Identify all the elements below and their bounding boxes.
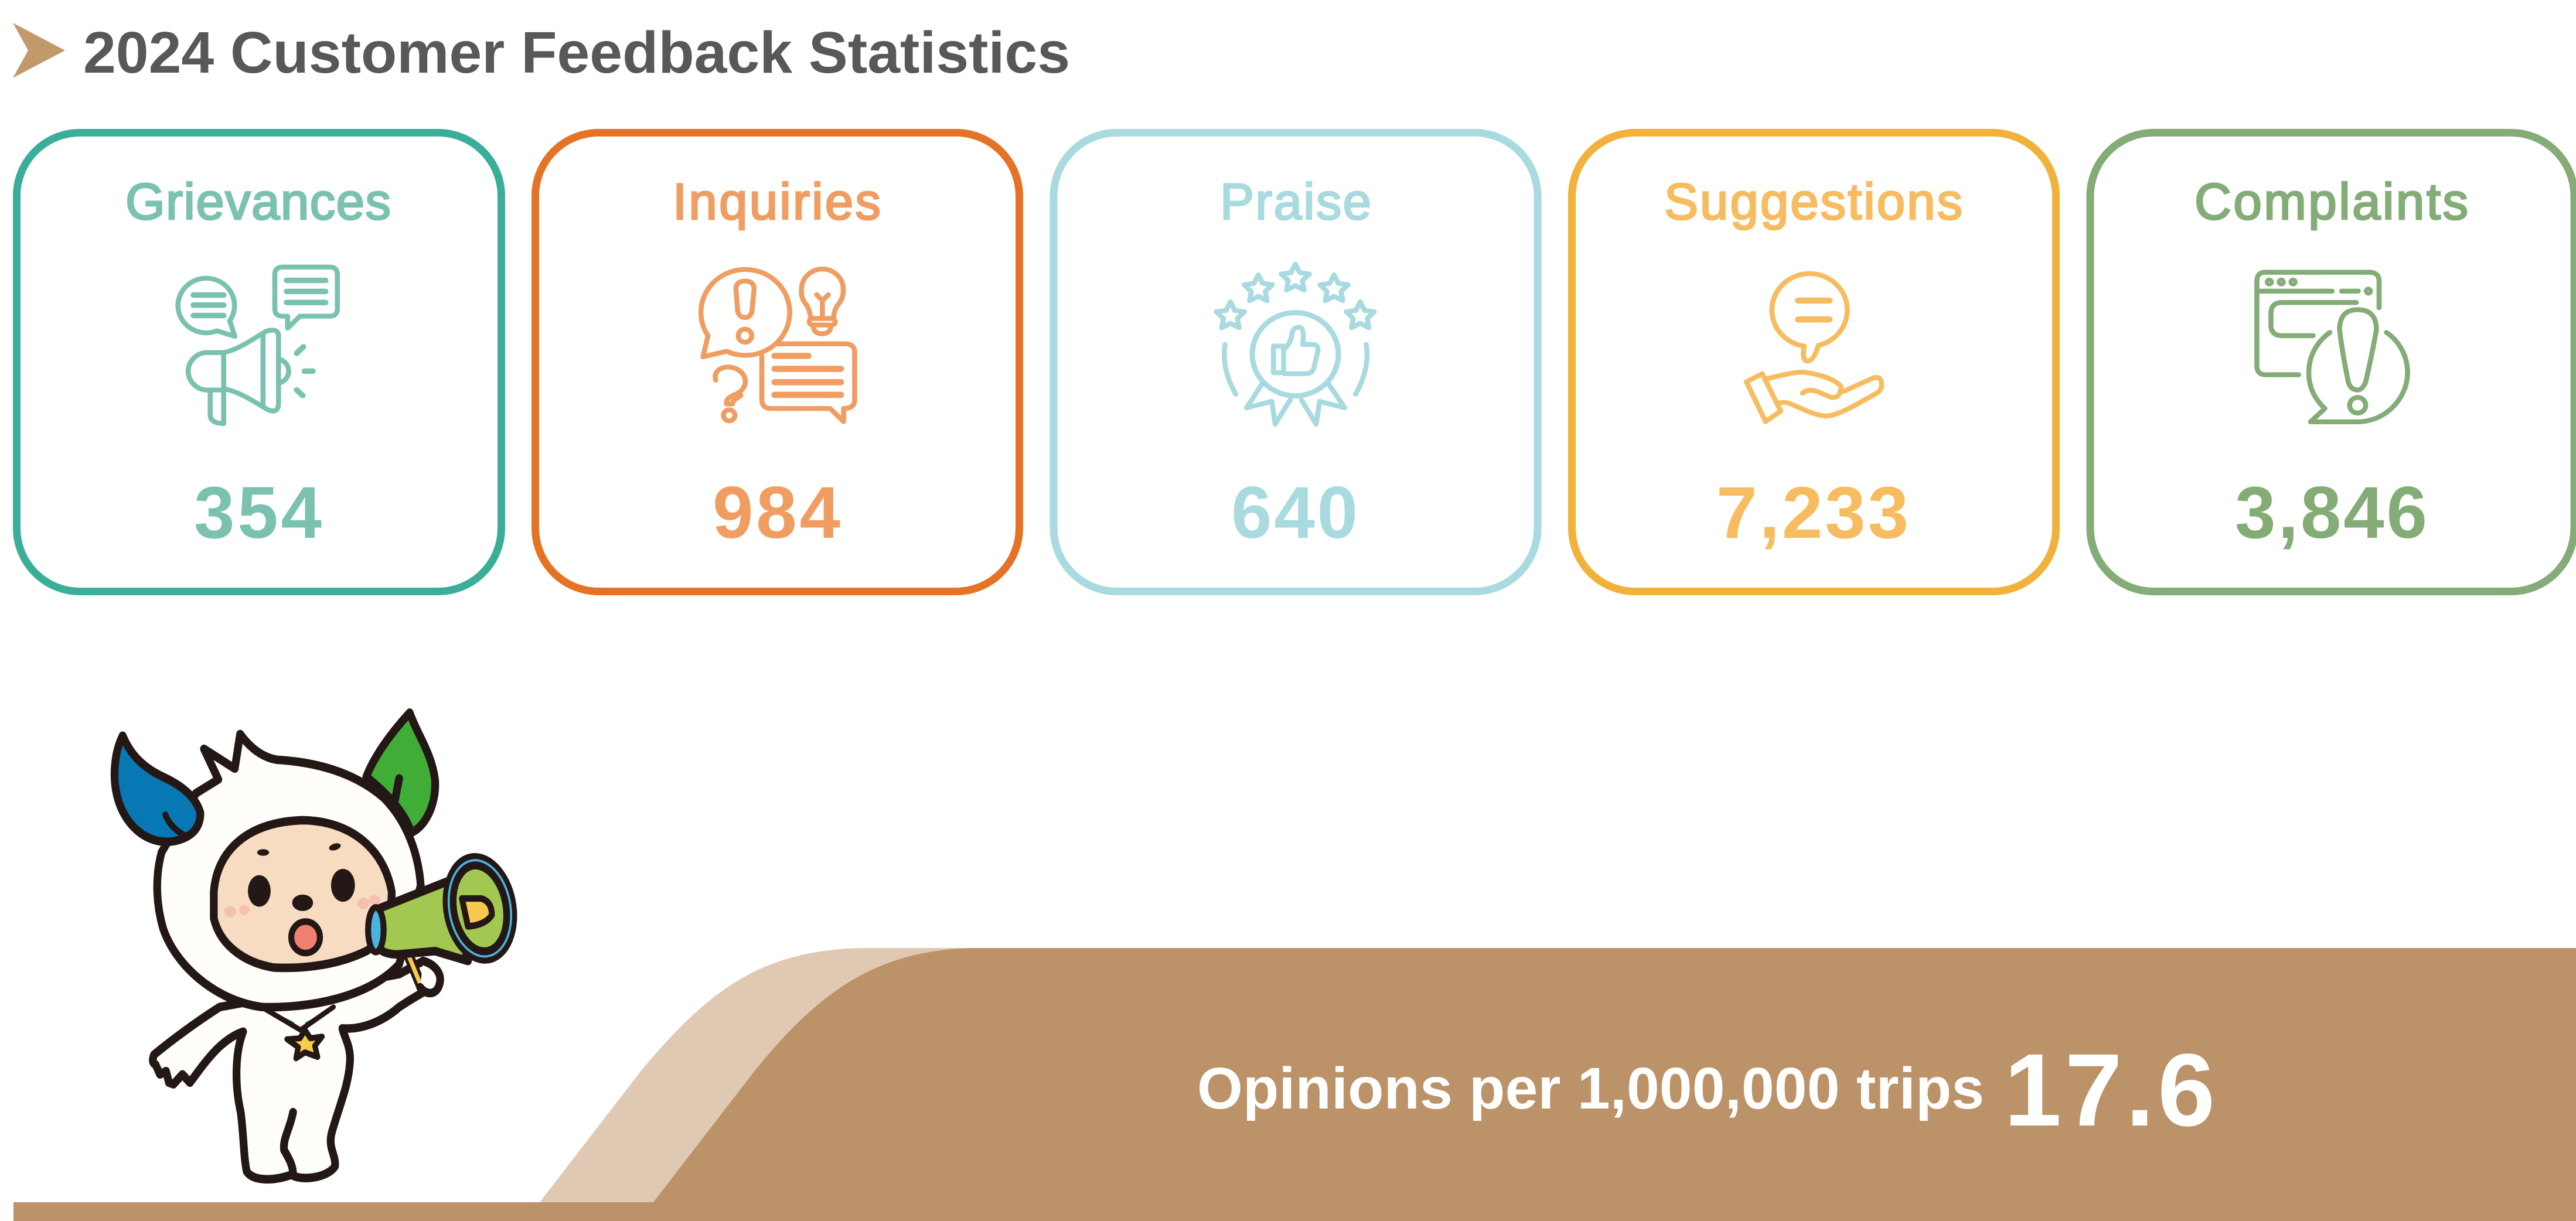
brown hill and ground bar — [13, 948, 2576, 1221]
panel: grievances — [16, 132, 502, 592]
icon: mascot with megaphone — [115, 712, 526, 1179]
value: suggestions: 7,233 — [1716, 472, 1909, 554]
icon: exclamation bubble, bulb, question mark — [701, 269, 855, 421]
value: complaints: 3,846 — [2235, 472, 2427, 554]
icon: award badge with thumbs up and stars — [1217, 264, 1374, 424]
statistic caption: Opinions per 1,000,000 trips — [1197, 1056, 1984, 1121]
statistic value: 17.6 — [2004, 1033, 2215, 1148]
label: grievances: Grievances — [125, 173, 391, 230]
light hill shadow — [540, 948, 996, 1202]
mascot leg split — [284, 1112, 293, 1175]
mascot face — [214, 820, 391, 968]
heading: section title — [13, 20, 1070, 86]
title text: 2024 Customer Feedback Statistics — [83, 20, 1070, 86]
value: grievances: 354 — [194, 472, 322, 554]
icon: megaphone with speech bubbles — [178, 267, 338, 424]
icon: browser window with warning bubble — [2257, 272, 2408, 422]
label: complaints: Complaints — [2195, 173, 2468, 230]
panel: bottom hill banner — [13, 948, 2576, 1221]
mascot hood head — [157, 734, 421, 1007]
panel: praise — [1054, 132, 1538, 592]
icon: title arrow — [13, 23, 65, 78]
mascot mouth — [291, 922, 320, 953]
panel: inquiries — [536, 132, 1020, 592]
label: praise: Praise — [1220, 173, 1371, 230]
mascot body and arms — [153, 961, 438, 1179]
label: suggestions: Suggestions — [1664, 173, 1962, 230]
mascot necklace — [262, 1007, 333, 1058]
label: inquiries: Inquiries — [673, 173, 881, 230]
icon: hand holding speech bubble — [1746, 274, 1882, 421]
value: inquiries: 984 — [713, 472, 840, 554]
mascot blue leaf ear — [115, 736, 200, 842]
panel: suggestions — [1572, 132, 2056, 592]
mascot green leaf ear — [366, 712, 435, 833]
mascot facial features — [224, 842, 381, 918]
panel: complaints — [2090, 132, 2574, 592]
mascot megaphone — [368, 845, 526, 993]
value: praise: 640 — [1231, 472, 1358, 554]
